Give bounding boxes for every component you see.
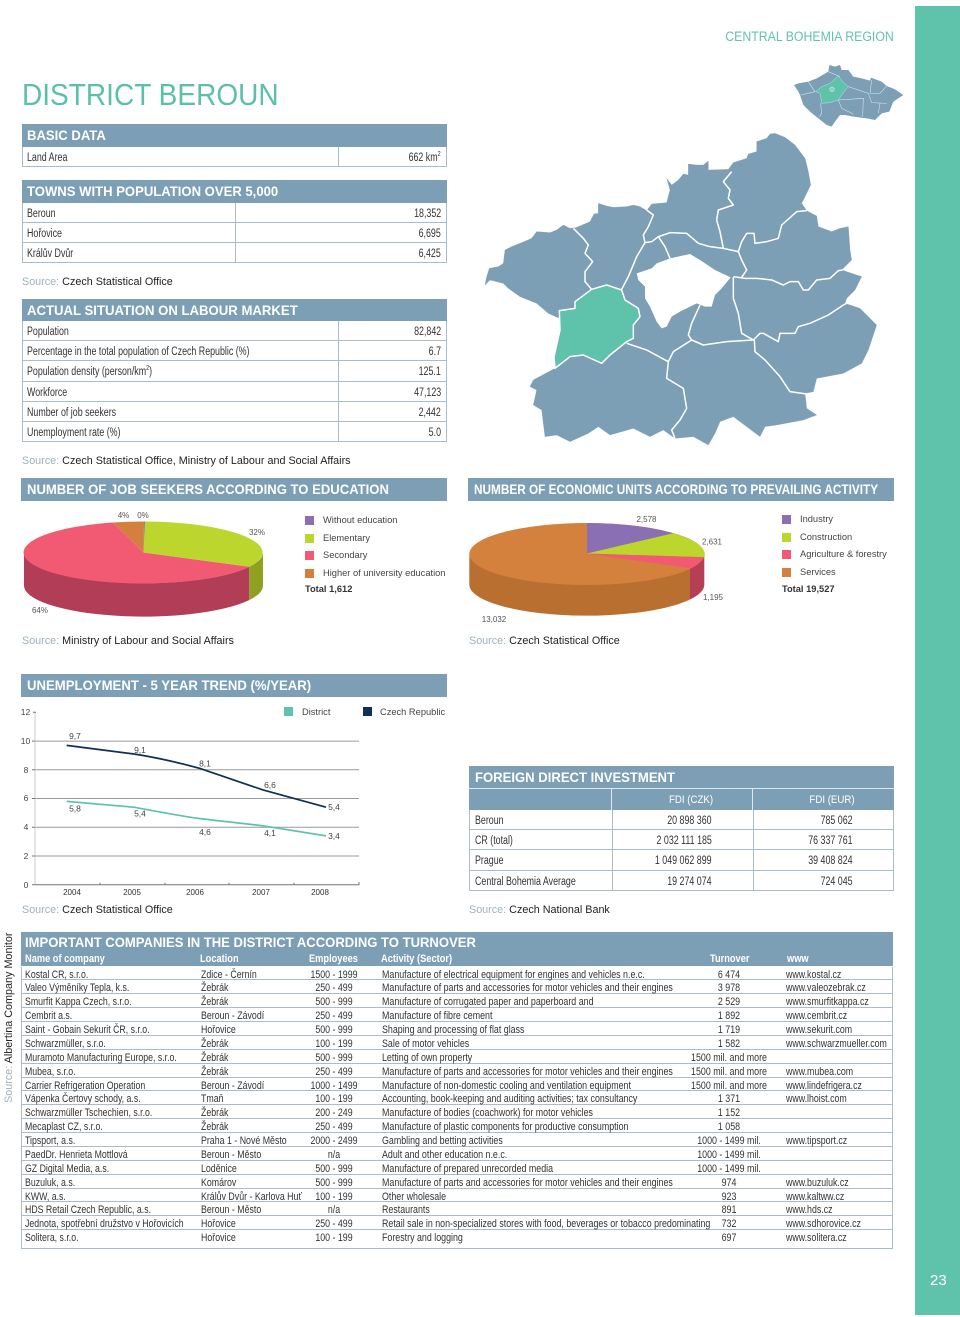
row 3: Žebrák xyxy=(200,996,228,1008)
row 14: n/a xyxy=(328,1149,340,1161)
row 4: 1 892 xyxy=(717,1010,740,1022)
pie chart: job seekers: 4% xyxy=(118,511,129,520)
legend item: agriculture xyxy=(782,549,887,559)
row 8: Manufacture of parts and accessories for motor vehicles and their engines xyxy=(382,1066,672,1078)
row 3 xyxy=(21,994,893,1008)
line chart: unemployment: 10 xyxy=(21,736,30,746)
source: labour market: Source: Czech Statistical Office, Ministry of Labour and Social Affairs xyxy=(22,455,350,467)
line chart: unemployment: 8 xyxy=(24,765,29,775)
row 16: 974 xyxy=(721,1177,736,1189)
row 20: www.solitera.cz xyxy=(786,1232,846,1244)
pie chart: economic units: 2,578 xyxy=(636,515,657,524)
row 8: www.mubea.com xyxy=(786,1066,853,1078)
row 8: 250 - 499 xyxy=(315,1066,353,1078)
row 15 xyxy=(21,1161,893,1175)
row 14: Beroun - Město xyxy=(200,1149,261,1161)
row 11: 1 152 xyxy=(717,1107,740,1119)
row 19: www.sdhorovice.cz xyxy=(786,1218,860,1230)
row 20: Forestry and logging xyxy=(382,1232,462,1244)
row: workforce xyxy=(22,382,447,402)
row: percentage xyxy=(22,341,447,361)
row: CR total: 2 032 111 185 xyxy=(657,835,712,847)
row 5: Shaping and processing of flat glass xyxy=(382,1024,524,1036)
row 17: KWW, a.s. xyxy=(25,1191,66,1203)
row 17: Other wholesale xyxy=(382,1191,446,1203)
panel: basic data xyxy=(22,124,447,167)
line chart: unemployment: 12 xyxy=(21,707,30,717)
row: Beroun: Beroun xyxy=(27,208,56,220)
row: Central Bohemia average xyxy=(468,871,894,891)
row 10: Tmaň xyxy=(200,1093,223,1105)
row 3: Manufacture of corrugated paper and paperboard and xyxy=(382,996,593,1008)
row 19: Hořovice xyxy=(200,1218,235,1230)
row: Beroun: 18,352 xyxy=(414,208,441,220)
line chart: unemployment: 6,6 xyxy=(264,780,276,790)
row: Prague xyxy=(468,850,894,871)
row 18: Beroun - Město xyxy=(200,1204,261,1216)
row 8: Mubea, s.r.o. xyxy=(25,1066,76,1078)
panel: labour market xyxy=(22,299,447,442)
row: job seekers xyxy=(22,402,447,422)
map: Czech Republic locator xyxy=(794,65,903,127)
row: Prague: 1 049 062 899 xyxy=(655,855,712,867)
legend item: construction xyxy=(782,532,852,542)
row: Hořovice: Hořovice xyxy=(27,228,62,240)
row 12: Žebrák xyxy=(200,1121,228,1133)
row: unemployment: Unemployment rate (%) xyxy=(27,427,121,439)
map: Central Bohemia districts xyxy=(484,65,904,446)
row 13: Tipsport, a.s. xyxy=(25,1135,75,1147)
row 13: Praha 1 - Nové Město xyxy=(200,1135,286,1147)
row 15: GZ Digital Media, a.s. xyxy=(25,1163,109,1175)
row 4: Manufacture of fibre cement xyxy=(382,1010,492,1022)
row: CR total xyxy=(468,830,894,850)
panel: companies table xyxy=(21,932,893,1249)
row: Beroun xyxy=(468,810,894,830)
legend: economic units: Services xyxy=(800,567,836,577)
row 11: Schwarzmüller Tschechien, s.r.o. xyxy=(25,1107,152,1119)
row 13 xyxy=(21,1133,893,1147)
heading: labour market xyxy=(22,298,447,321)
row 19: 732 xyxy=(721,1218,736,1230)
row: Prague: Prague xyxy=(475,855,504,867)
row: Beroun: Beroun xyxy=(475,815,504,827)
row 18: www.hds.cz xyxy=(786,1204,832,1216)
row 11: 200 - 249 xyxy=(315,1107,353,1119)
row: land area xyxy=(22,146,447,167)
row 8 xyxy=(21,1064,893,1078)
row 2: 3 978 xyxy=(717,982,740,994)
row: density: Population density (person/km2) xyxy=(27,366,152,378)
title: DISTRICT BEROUN xyxy=(22,77,279,112)
source: companies vertical: Source: Albertina Company Monitor xyxy=(3,933,15,1103)
row 12: 250 - 499 xyxy=(315,1121,353,1133)
legend: job seekers: Higher of university education xyxy=(323,568,445,578)
row 14: PaedDr. Henrieta Mottlová xyxy=(25,1149,128,1161)
row 20: Solitera, s.r.o. xyxy=(25,1232,79,1244)
row 1: www.kostal.cz xyxy=(786,968,841,980)
panel: towns xyxy=(22,180,447,263)
heading: unemployment: UNEMPLOYMENT - 5 YEAR TREND (%/YEAR) xyxy=(27,677,311,693)
row 6: 1 582 xyxy=(717,1038,740,1050)
row: population: Population xyxy=(27,326,69,338)
row 6: 100 - 199 xyxy=(315,1038,353,1050)
row 3: Smurfit Kappa Czech, s.r.o. xyxy=(25,996,132,1008)
row 8: Žebrák xyxy=(200,1066,228,1078)
row 18: HDS Retail Czech Republic, a.s. xyxy=(25,1204,151,1216)
legend total: Total 19,527 xyxy=(782,584,835,594)
column headers: Name of company xyxy=(25,952,105,964)
row: CR total: 76 337 761 xyxy=(809,835,853,847)
row 2: Žebrák xyxy=(200,982,228,994)
legend item: industry xyxy=(782,514,833,524)
line chart: unemployment: 2006 xyxy=(186,888,204,897)
line chart: unemployment: 4,1 xyxy=(264,828,276,838)
pie chart: job seekers xyxy=(24,511,265,617)
line chart: unemployment: 2008 xyxy=(311,888,329,897)
line chart: unemployment: 2007 xyxy=(252,888,270,897)
column headers: FDI (CZK) xyxy=(668,794,713,806)
heading: towns: TOWNS WITH POPULATION OVER 5,000 xyxy=(27,183,278,199)
line chart: unemployment xyxy=(21,707,445,897)
heading: basic data: BASIC DATA xyxy=(27,127,106,143)
row: Hořovice: 6,695 xyxy=(419,228,441,240)
pie chart: job seekers: 32% xyxy=(249,528,265,537)
row 3: 2 529 xyxy=(717,996,740,1008)
legend: economic units: Industry xyxy=(800,514,833,524)
source: economic units: Source: Czech Statistical Office xyxy=(468,635,619,647)
row: Beroun: 785 062 xyxy=(821,815,853,827)
column headers: Activity (Sector) xyxy=(381,952,452,964)
heading: companies xyxy=(21,932,893,966)
heading: FDI: FOREIGN DIRECT INVESTMENT xyxy=(475,769,675,785)
legend: job seekers xyxy=(305,515,445,594)
row: Central Bohemia average: 19 274 074 xyxy=(668,876,712,888)
row 16: www.buzuluk.cz xyxy=(786,1177,848,1189)
source: FDI: Source: Czech National Bank xyxy=(468,904,609,916)
row 6: Sale of motor vehicles xyxy=(382,1038,469,1050)
line chart: unemployment: 0 xyxy=(24,880,29,890)
row 16: 500 - 999 xyxy=(315,1177,353,1189)
row 5: Saint - Gobain Sekurit ČR, s.r.o. xyxy=(25,1024,150,1036)
column headers xyxy=(468,788,894,810)
row: Central Bohemia average: Central Bohemia Average xyxy=(475,876,576,888)
pie chart: economic units xyxy=(469,515,724,624)
row 9: Manufacture of non-domestic cooling and ventilation equipment xyxy=(382,1080,630,1092)
line chart: unemployment: 4,6 xyxy=(199,827,211,837)
row 5: 1 719 xyxy=(717,1024,740,1036)
legend item: elementary xyxy=(305,533,370,543)
row 2: www.valeozebrak.cz xyxy=(786,982,865,994)
row 12 xyxy=(21,1119,893,1133)
pie chart: job seekers: 0% xyxy=(137,511,149,520)
column headers xyxy=(25,952,809,964)
row 5: 500 - 999 xyxy=(315,1024,353,1036)
row 19: 250 - 499 xyxy=(315,1218,353,1230)
legend: job seekers: Elementary xyxy=(323,533,370,543)
heading: towns xyxy=(22,180,447,202)
line chart: unemployment: 5,4 xyxy=(328,802,340,812)
row 17 xyxy=(21,1189,893,1202)
row 5 xyxy=(21,1022,893,1036)
row 15: 1000 - 1499 mil. xyxy=(697,1163,760,1175)
line chart: unemployment: 5,8 xyxy=(69,804,81,814)
row 9: Carrier Refrigeration Operation xyxy=(25,1080,145,1092)
row 10: 1 371 xyxy=(717,1093,740,1105)
column headers: Location xyxy=(200,952,239,964)
row 19: Retail sale in non-specialized stores with food, beverages or tobacco predominating xyxy=(382,1218,710,1230)
row 8: 1500 mil. and more xyxy=(691,1066,766,1078)
row 2: Manufacture of parts and accessories for motor vehicles and their engines xyxy=(382,982,672,994)
row 6: Schwarzmüller, s.r.o. xyxy=(25,1038,106,1050)
row 17: 923 xyxy=(721,1191,736,1203)
source: unemployment: Source: Czech Statistical Office xyxy=(22,904,172,916)
row: Králův Dvůr xyxy=(22,243,447,263)
legend: job seekers: Without education xyxy=(323,515,397,525)
row 6: Žebrák xyxy=(200,1038,228,1050)
row 10: 100 - 199 xyxy=(315,1093,353,1105)
row: Beroun: 20 898 360 xyxy=(668,815,712,827)
row: density xyxy=(22,361,447,382)
row 10 xyxy=(21,1091,893,1105)
row 3: www.smurfitkappa.cz xyxy=(786,996,868,1008)
row 7: 500 - 999 xyxy=(315,1052,353,1064)
row 13: 1000 - 1499 mil. xyxy=(697,1135,760,1147)
pie chart: economic units: 13,032 xyxy=(482,615,507,624)
row 5: Hořovice xyxy=(200,1024,235,1036)
row 16 xyxy=(21,1175,893,1189)
row 14: Adult and other education n.e.c. xyxy=(382,1149,507,1161)
column headers: FDI (EUR) xyxy=(809,794,854,806)
row: land area: Land Area xyxy=(27,152,67,164)
row: land area: 662 km2 xyxy=(409,151,441,164)
column headers: Turnover xyxy=(710,952,749,964)
row 17: Králův Dvůr - Karlova Huť xyxy=(200,1191,301,1203)
legend item: services xyxy=(782,567,836,577)
row 7 xyxy=(21,1050,893,1064)
legend: economic units: Construction xyxy=(800,532,852,542)
row 3: 500 - 999 xyxy=(315,996,353,1008)
pie chart: job seekers: 64% xyxy=(32,606,48,615)
heading: companies: IMPORTANT COMPANIES IN THE DISTRICT ACCORDING TO TURNOVER xyxy=(25,934,476,950)
line chart: unemployment: 2005 xyxy=(123,888,141,897)
row 10: www.lhoist.com xyxy=(786,1093,846,1105)
row 1: Kostal CR, s.r.o. xyxy=(25,968,88,980)
row 7: Letting of own property xyxy=(382,1052,472,1064)
line chart: unemployment: 6 xyxy=(24,793,29,803)
row: Central Bohemia average: 724 045 xyxy=(821,876,853,888)
row 11 xyxy=(21,1105,893,1119)
row 18 xyxy=(21,1202,893,1216)
row 12: 1 058 xyxy=(717,1121,740,1133)
line chart: unemployment: 3,4 xyxy=(328,831,340,841)
row 9: www.lindefrigera.cz xyxy=(786,1080,861,1092)
row: Králův Dvůr: Králův Dvůr xyxy=(27,248,73,260)
row 18: 891 xyxy=(721,1204,736,1216)
line chart: unemployment: 2004 xyxy=(63,888,81,897)
row: population xyxy=(22,321,447,341)
row 15: Loděnice xyxy=(200,1163,236,1175)
legend: economic units xyxy=(782,514,887,594)
row 18: Restaurants xyxy=(382,1204,429,1216)
line chart: unemployment: 8,1 xyxy=(199,758,211,768)
row: job seekers: 2,442 xyxy=(419,407,441,419)
row 4: 250 - 499 xyxy=(315,1010,353,1022)
row 7: 1500 mil. and more xyxy=(691,1052,766,1064)
row 20 xyxy=(21,1230,893,1249)
legend: economic units: Agriculture & forestry xyxy=(800,549,887,559)
row 4 xyxy=(21,1008,893,1022)
row 11: Žebrák xyxy=(200,1107,228,1119)
line chart: unemployment: 5,4 xyxy=(134,808,146,818)
row 19: Jednota, spotřební družstvo v Hořovicích xyxy=(25,1218,184,1230)
row: percentage: 6.7 xyxy=(429,346,441,358)
row 12: Manufacture of plastic components for productive consumption xyxy=(382,1121,628,1133)
row 2: 250 - 499 xyxy=(315,982,353,994)
legend: job seekers: Secondary xyxy=(323,550,367,560)
heading: labour market: ACTUAL SITUATION ON LABOUR MARKET xyxy=(27,302,298,318)
row: Prague: 39 408 824 xyxy=(809,855,853,867)
row 2 xyxy=(21,980,893,994)
row 11: Manufacture of bodies (coachwork) for motor vehicles xyxy=(382,1107,592,1119)
row 19 xyxy=(21,1216,893,1230)
row: CR total: CR (total) xyxy=(475,835,513,847)
row: workforce: Workforce xyxy=(27,387,67,399)
source: towns: Source: Czech Statistical Office xyxy=(22,276,172,288)
row 16: Manufacture of parts and accessories for motor vehicles and their engines xyxy=(382,1177,672,1189)
row: population: 82,842 xyxy=(414,326,441,338)
row 20: Hořovice xyxy=(200,1232,235,1244)
row 20: 697 xyxy=(721,1232,736,1244)
row 14: 1000 - 1499 mil. xyxy=(697,1149,760,1161)
row 4: Cembrit a.s. xyxy=(25,1010,72,1022)
row 17: www.kaltww.cz xyxy=(786,1191,844,1203)
heading: job seekers: NUMBER OF JOB SEEKERS ACCORDING TO EDUCATION xyxy=(27,481,389,497)
line chart: unemployment: Czech Republic xyxy=(380,707,445,717)
row 14 xyxy=(21,1147,893,1161)
column headers: www xyxy=(787,952,809,964)
row: percentage: Percentage in the total population of Czech Republic (%) xyxy=(27,346,249,358)
row 4: Beroun - Závodí xyxy=(200,1010,264,1022)
row 15: 500 - 999 xyxy=(315,1163,353,1175)
row 13: www.tipsport.cz xyxy=(786,1135,847,1147)
row 9 xyxy=(21,1078,893,1091)
page number: 23 xyxy=(930,1272,947,1289)
line chart: unemployment: 4 xyxy=(24,822,29,832)
row 17: 100 - 199 xyxy=(315,1191,353,1203)
row: Králův Dvůr: 6,425 xyxy=(419,248,441,260)
row: job seekers: Number of job seekers xyxy=(27,407,116,419)
row 1: Zdice - Černín xyxy=(200,968,256,980)
row: Beroun xyxy=(22,202,447,223)
row 9: Beroun - Závodí xyxy=(200,1080,264,1092)
row 20: 100 - 199 xyxy=(315,1232,353,1244)
row 15: Manufacture of prepared unrecorded media xyxy=(382,1163,553,1175)
row: unemployment: 5.0 xyxy=(429,427,441,439)
row 9: 1500 mil. and more xyxy=(691,1080,766,1092)
row 5: www.sekurit.com xyxy=(786,1024,852,1036)
legend item: without education xyxy=(305,515,397,525)
row 18: n/a xyxy=(328,1204,340,1216)
row 13: Gambling and betting activities xyxy=(382,1135,502,1147)
row 6 xyxy=(21,1036,893,1050)
row 7: Žebrák xyxy=(200,1052,228,1064)
line chart: unemployment: 2 xyxy=(24,851,29,861)
pie chart: economic units: 1,195 xyxy=(703,593,724,602)
row 1 xyxy=(21,966,893,980)
source: job seekers: Source: Ministry of Labour and Social Affairs xyxy=(22,635,233,647)
row: unemployment xyxy=(22,422,447,442)
pie chart: economic units: 2,631 xyxy=(702,538,723,546)
row 13: 2000 - 2499 xyxy=(310,1135,358,1147)
row 1: Manufacture of electrical equipment for engines and vehicles n.e.c. xyxy=(382,968,644,980)
line chart: unemployment: District xyxy=(302,707,331,717)
column headers: Employees xyxy=(309,952,358,964)
row: density: 125.1 xyxy=(419,366,441,378)
region heading: CENTRAL BOHEMIA REGION xyxy=(725,28,894,44)
row 4: www.cembrit.cz xyxy=(786,1010,847,1022)
sidebar band xyxy=(915,6,960,1315)
row 1: 6 474 xyxy=(717,968,740,980)
row 16: Komárov xyxy=(200,1177,236,1189)
line chart: unemployment: 9,7 xyxy=(69,731,81,741)
row 10: Vápenka Čertovy schody, a.s. xyxy=(25,1093,141,1105)
row: workforce: 47,123 xyxy=(414,387,441,399)
heading: FDI xyxy=(468,766,894,788)
row 16: Buzuluk, a.s. xyxy=(25,1177,75,1189)
row 10: Accounting, book-keeping and auditing activities; tax consultancy xyxy=(382,1093,637,1105)
row 2: Valeo Výměníky Tepla, k.s. xyxy=(25,982,129,994)
row 6: www.schwarzmueller.com xyxy=(786,1038,886,1050)
row 1: 1500 - 1999 xyxy=(310,968,358,980)
panel: foreign direct investment xyxy=(469,766,894,891)
heading: economic units: NUMBER OF ECONOMIC UNITS ACCORDING TO PREVAILING ACTIVITY xyxy=(474,481,878,497)
row: Hořovice xyxy=(22,223,447,243)
legend total: Total 1,612 xyxy=(305,584,352,594)
legend item: secondary xyxy=(305,550,368,560)
row 7: Muramoto Manufacturing Europe, s.r.o. xyxy=(25,1052,177,1064)
row 9: 1000 - 1499 xyxy=(310,1080,358,1092)
row 12: Mecaplast CZ, s.r.o. xyxy=(25,1121,103,1133)
line chart: unemployment: 9,1 xyxy=(134,745,146,755)
legend item: higher education xyxy=(305,568,445,578)
heading: basic data xyxy=(22,124,447,146)
